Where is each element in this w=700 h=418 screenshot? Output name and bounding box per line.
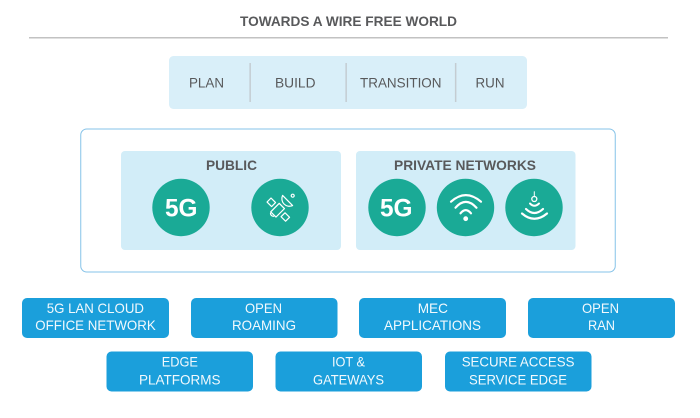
- button: open RAN: OPEN: [582, 300, 619, 316]
- title: TOWARDS A WIRE FREE WORLD: [240, 13, 457, 29]
- panel: project phases: PLAN: [189, 74, 224, 90]
- panel: project phases: TRANSITION: [360, 74, 442, 90]
- button: open roaming: [191, 298, 338, 338]
- icon: public 5G: [152, 179, 210, 236]
- button: open roaming: OPEN: [245, 300, 282, 316]
- button: MEC applications: [359, 298, 506, 338]
- panel: public: [121, 151, 341, 250]
- button: edge platforms: EDGE: [162, 354, 198, 370]
- button: IoT and gateways: GATEWAYS: [313, 371, 384, 387]
- button: secure access service edge: SERVICE EDGE: [469, 371, 567, 387]
- panel: project phases: RUN: [476, 74, 504, 90]
- button: MEC applications: APPLICATIONS: [384, 317, 481, 333]
- panel: project phases: BUILD: [275, 74, 316, 90]
- button: secure access service edge: SECURE ACCESS: [462, 354, 574, 370]
- button: 5G LAN cloud office network: 5G LAN CLOUD: [47, 300, 144, 316]
- button: 5G LAN cloud office network: [22, 298, 169, 338]
- icon: satellite: [251, 179, 309, 236]
- button: edge platforms: [106, 352, 253, 392]
- button: IoT and gateways: IOT &: [332, 354, 366, 370]
- panel: private networks: [356, 151, 576, 250]
- button: 5G LAN cloud office network: OFFICE NETWORK: [35, 317, 156, 333]
- icon: private 5G: [368, 179, 426, 236]
- button: open roaming: ROAMING: [232, 317, 296, 333]
- button: open RAN: RAN: [588, 317, 615, 333]
- icon: private 5G: 5G: [380, 195, 412, 223]
- panel: project phases: [169, 56, 527, 109]
- icon: wireless signal: [505, 179, 563, 236]
- button: IoT and gateways: [276, 352, 422, 392]
- heading: private networks: PRIVATE NETWORKS: [394, 157, 536, 173]
- heading: public: PUBLIC: [206, 157, 257, 173]
- button: edge platforms: PLATFORMS: [139, 371, 220, 387]
- button: MEC applications: MEC: [418, 300, 448, 316]
- panel: network types frame: [81, 129, 615, 272]
- button: open RAN: [528, 298, 675, 338]
- icon: wifi: [437, 179, 494, 236]
- icon: public 5G: 5G: [165, 195, 198, 223]
- button: secure access service edge: [445, 352, 592, 392]
